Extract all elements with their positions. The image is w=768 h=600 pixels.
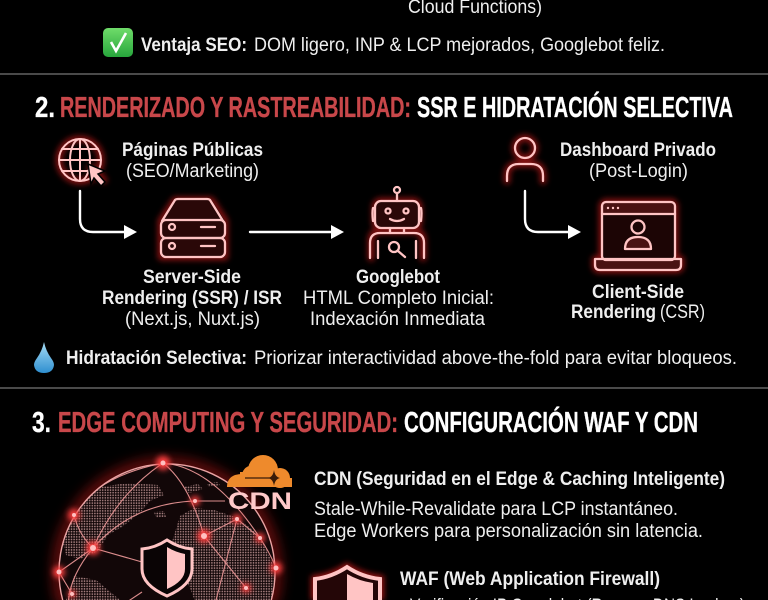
icon: laptop with user [595,202,681,270]
heading: section 3: EDGE COMPUTING Y SEGURIDAD: [58,407,398,439]
heading: section 2 [35,90,733,124]
text: public pages: Páginas Públicas [122,140,263,161]
text: Googlebot label: Googlebot [356,267,441,288]
icon: CDN cloud logo [227,455,292,515]
text: CDN: CDN [228,488,292,515]
icon: user [507,138,543,181]
icon: WAF shield [315,567,380,600]
text: CSR label: Rendering [571,302,656,323]
text: hydration label: Hidratación Selectiva: [66,348,247,369]
heading: section 2: 2. [35,92,55,124]
text block: CDN: Stale-While-Revalidate para LCP instantáneo. [314,499,678,520]
text: WAF title: WAF (Web Application Firewall) [400,569,660,590]
text: CSR label: (CSR) [660,302,705,323]
text: Googlebot label: Indexación Inmediata [310,309,485,330]
text: CSR label: Client-Side [592,282,684,303]
text: CSR label [571,282,705,323]
arrow: dashboard to CSR [525,191,581,239]
icon: globe with cursor [59,139,105,186]
icon: central shield [142,540,192,596]
text: private dashboard: (Post-Login) [589,161,688,182]
network nodes [53,456,282,598]
icon: green check [103,28,133,57]
text: SEO advantage detail: DOM ligero, INP & LCP mejorados, Googlebot feliz. [254,35,665,56]
text: Googlebot label: HTML Completo Inicial: [303,288,494,309]
icon: robot [370,187,424,258]
text: SSR label: Rendering (SSR) / ISR [102,288,282,309]
callout: selective hydration [34,342,737,373]
heading: section 3 [32,405,698,439]
illustration: network globe [53,456,282,600]
text block: CDN: Edge Workers para personalización sin latencia. [314,521,703,542]
arrow: pages to SSR [80,191,137,239]
icon: water drop [34,342,54,373]
callout: SEO advantage [103,28,665,57]
text: hydration detail: Priorizar interactividad above-the-fold para evitar bloqueos. [254,348,737,369]
text: public pages: (SEO/Marketing) [126,161,259,182]
text: Googlebot label [303,267,494,330]
heading: section 2: RENDERIZADO Y RASTREABILIDAD: [60,92,411,124]
text block: CDN: CDN (Seguridad en el Edge & Caching Inteligente) [314,469,725,490]
text: private dashboard [560,140,716,182]
text: SSR label [102,267,282,330]
text: private dashboard: Dashboard Privado [560,140,716,161]
heading: section 3: 3. [32,407,51,439]
text: SEO advantage label: Ventaja SEO: [141,35,247,56]
icon: server [161,199,225,257]
text block: CDN [314,469,725,542]
arrow: SSR to Googlebot [250,225,344,239]
text: SSR label: (Next.js, Nuxt.js) [125,309,260,330]
text: SSR label: Server-Side [143,267,241,288]
text: public pages [122,140,263,182]
